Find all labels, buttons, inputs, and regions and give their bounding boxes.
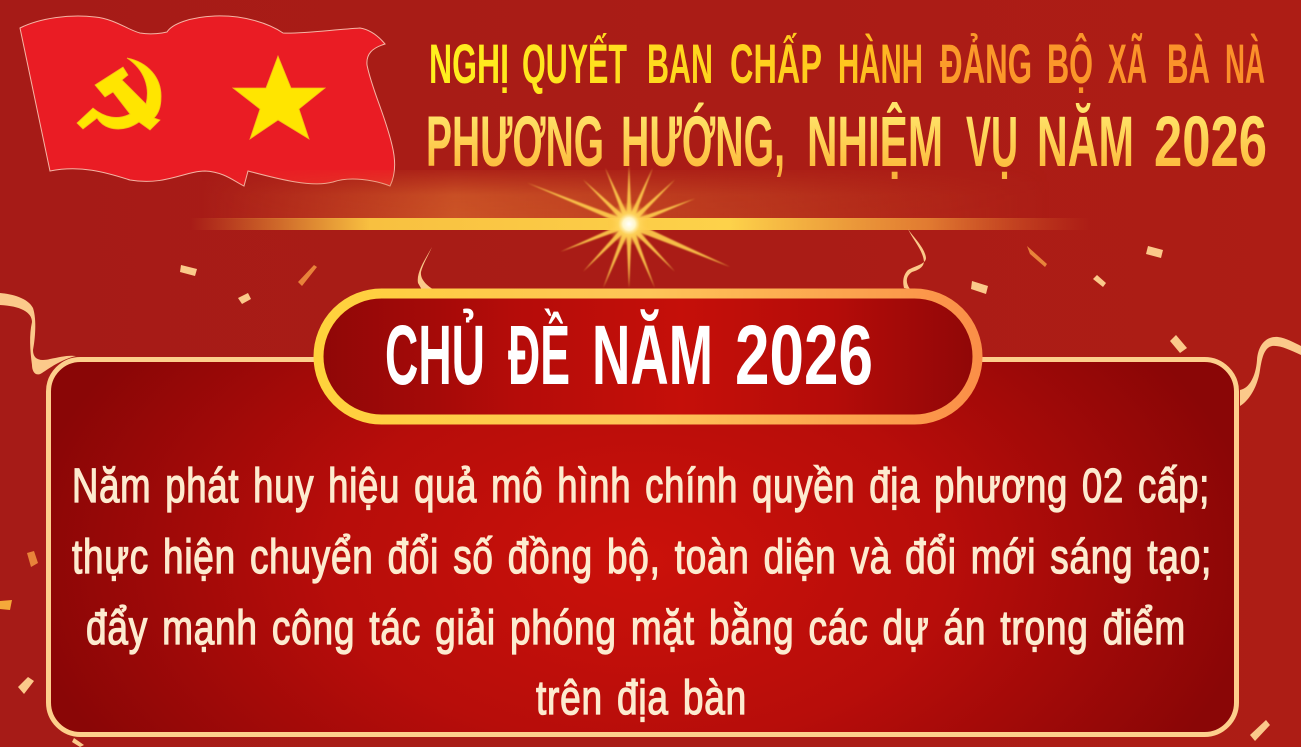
title line 2: NĂM — [1037, 103, 1134, 182]
title line 2: HƯỚNG, — [621, 103, 785, 182]
panel: theme content — [48, 360, 1236, 734]
body text — [72, 460, 1212, 725]
title line 1: HÀNH — [838, 32, 923, 95]
heading text: NĂM — [592, 308, 713, 402]
title line 1: BAN — [647, 32, 713, 95]
title line 2: PHƯƠNG — [426, 103, 604, 182]
title line 1: XÃ — [1108, 32, 1147, 95]
heading text: CHỦ — [385, 308, 485, 402]
title line 2: NHIỆM — [807, 102, 943, 182]
title line 2: VỤ — [966, 103, 1018, 182]
body text: trên địa bàn — [536, 672, 747, 725]
sunburst light beam — [190, 165, 1090, 289]
heading text — [385, 308, 873, 402]
title line 2 — [426, 102, 1267, 182]
title line 1 — [429, 32, 1265, 95]
icon: waving flag — [20, 16, 395, 186]
title line 1: ĐẢNG — [940, 32, 1032, 95]
title line 1: CHẤP — [730, 32, 822, 95]
title line 1: NGHỊ — [429, 32, 509, 95]
icon: star — [233, 56, 325, 139]
title line 1: BÀ — [1167, 32, 1210, 95]
heading pill — [318, 294, 978, 420]
title line 1: QUYẾT — [522, 32, 627, 95]
heading text: ĐỀ — [508, 308, 570, 402]
icon: hammer and sickle — [77, 58, 161, 130]
title line 1: BỘ — [1047, 32, 1093, 95]
confetti and ribbons — [0, 229, 1301, 747]
heading text: 2026 — [735, 308, 873, 402]
